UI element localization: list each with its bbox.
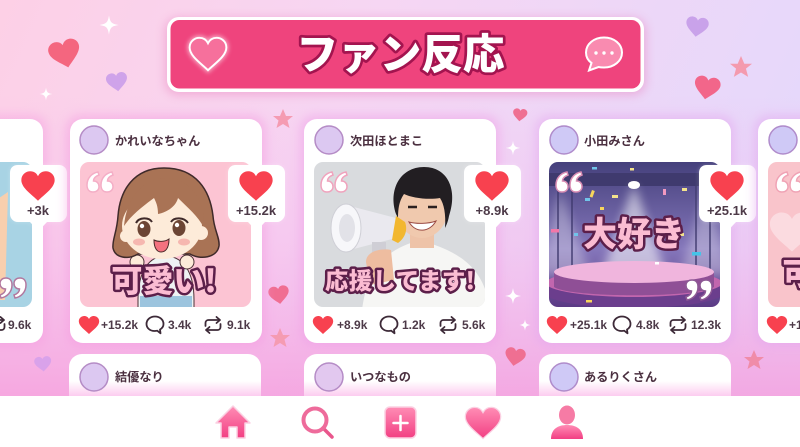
- panel: left partial card: [0, 115, 47, 347]
- panel: lower card あるりくさん: あるりくさん: [584, 370, 657, 384]
- stats row: [313, 316, 486, 334]
- image: chibi girl: [80, 162, 251, 310]
- stat text: [0, 317, 32, 333]
- icon: profile: [551, 406, 583, 439]
- stat text: 9.6k: [8, 318, 32, 332]
- callout: left likes: +3k: [27, 203, 50, 218]
- image: concert stage: 大好き: [583, 207, 685, 256]
- callout: likes +15.2k: [228, 165, 285, 231]
- image: chibi girl: 可愛い!: [111, 256, 217, 301]
- stats row: [79, 316, 251, 334]
- stats row: 3.4k: [168, 318, 192, 332]
- title text: ファン反応: [296, 21, 504, 82]
- panel: lower card あるりくさん: [539, 354, 731, 414]
- panel: lower card 結優なり: 結優なり: [115, 369, 164, 384]
- callout: likes +8.9k: +8.9k: [476, 203, 509, 218]
- username: かれいなちゃん: [115, 134, 200, 148]
- quote marks: [556, 172, 712, 300]
- icon: heart: [465, 407, 501, 439]
- quote mark: [776, 172, 800, 192]
- icon: chat bubble: [586, 38, 622, 70]
- username: 次田ほとまこ: [350, 133, 423, 148]
- callout: likes +25.1k: [699, 165, 756, 231]
- stats row: +25.1k: [570, 318, 607, 332]
- callout: likes +15.2k: +15.2k: [236, 203, 277, 218]
- username: 小田みさん: [584, 134, 645, 148]
- panel: lower card いつなもの: [304, 354, 496, 414]
- quote mark: [87, 172, 113, 192]
- stats row: [767, 316, 800, 334]
- panel: card かれいなちゃん: [66, 115, 266, 347]
- panel: lower card 結優なり: [69, 354, 261, 414]
- avatar: [80, 126, 108, 154]
- stats row: +15.2k: [101, 318, 138, 332]
- image: pink hearts: [768, 162, 800, 307]
- icon: heart outline: [190, 38, 226, 70]
- avatar: [769, 126, 797, 154]
- icon: home: [216, 406, 250, 438]
- icon: search: [304, 408, 332, 437]
- icon: add: [385, 407, 416, 438]
- image: blue photo: [0, 162, 32, 307]
- stats row: [547, 316, 721, 334]
- panel: lower card いつなもの: いつなもの: [350, 370, 411, 384]
- avatar: [315, 126, 343, 154]
- title banner: [165, 17, 646, 95]
- panel: card 小田みさん: [535, 115, 735, 347]
- image: man with megaphone: 応援してます!: [325, 262, 475, 296]
- callout: likes +8.9k: [464, 165, 521, 231]
- callout: left likes: [10, 165, 67, 231]
- stats row: 12.3k: [691, 318, 721, 332]
- stats row: 9.1k: [227, 318, 251, 332]
- stats row: 5.6k: [462, 318, 486, 332]
- stats row: 1.2k: [402, 318, 426, 332]
- image: man with megaphone: [314, 162, 490, 310]
- avatar: [550, 126, 578, 154]
- image: concert stage: [549, 162, 720, 307]
- stats row: 4.8k: [636, 318, 660, 332]
- decorative hearts, stars and sparkles: [34, 15, 764, 372]
- panel: card 次田ほとまこ: [300, 115, 500, 347]
- quote mark: [321, 172, 347, 192]
- bottom navigation bar: [0, 396, 800, 447]
- stats row: +8.9k: [337, 318, 368, 332]
- panel: right partial card: [754, 115, 800, 347]
- callout: likes +25.1k: +25.1k: [707, 203, 748, 218]
